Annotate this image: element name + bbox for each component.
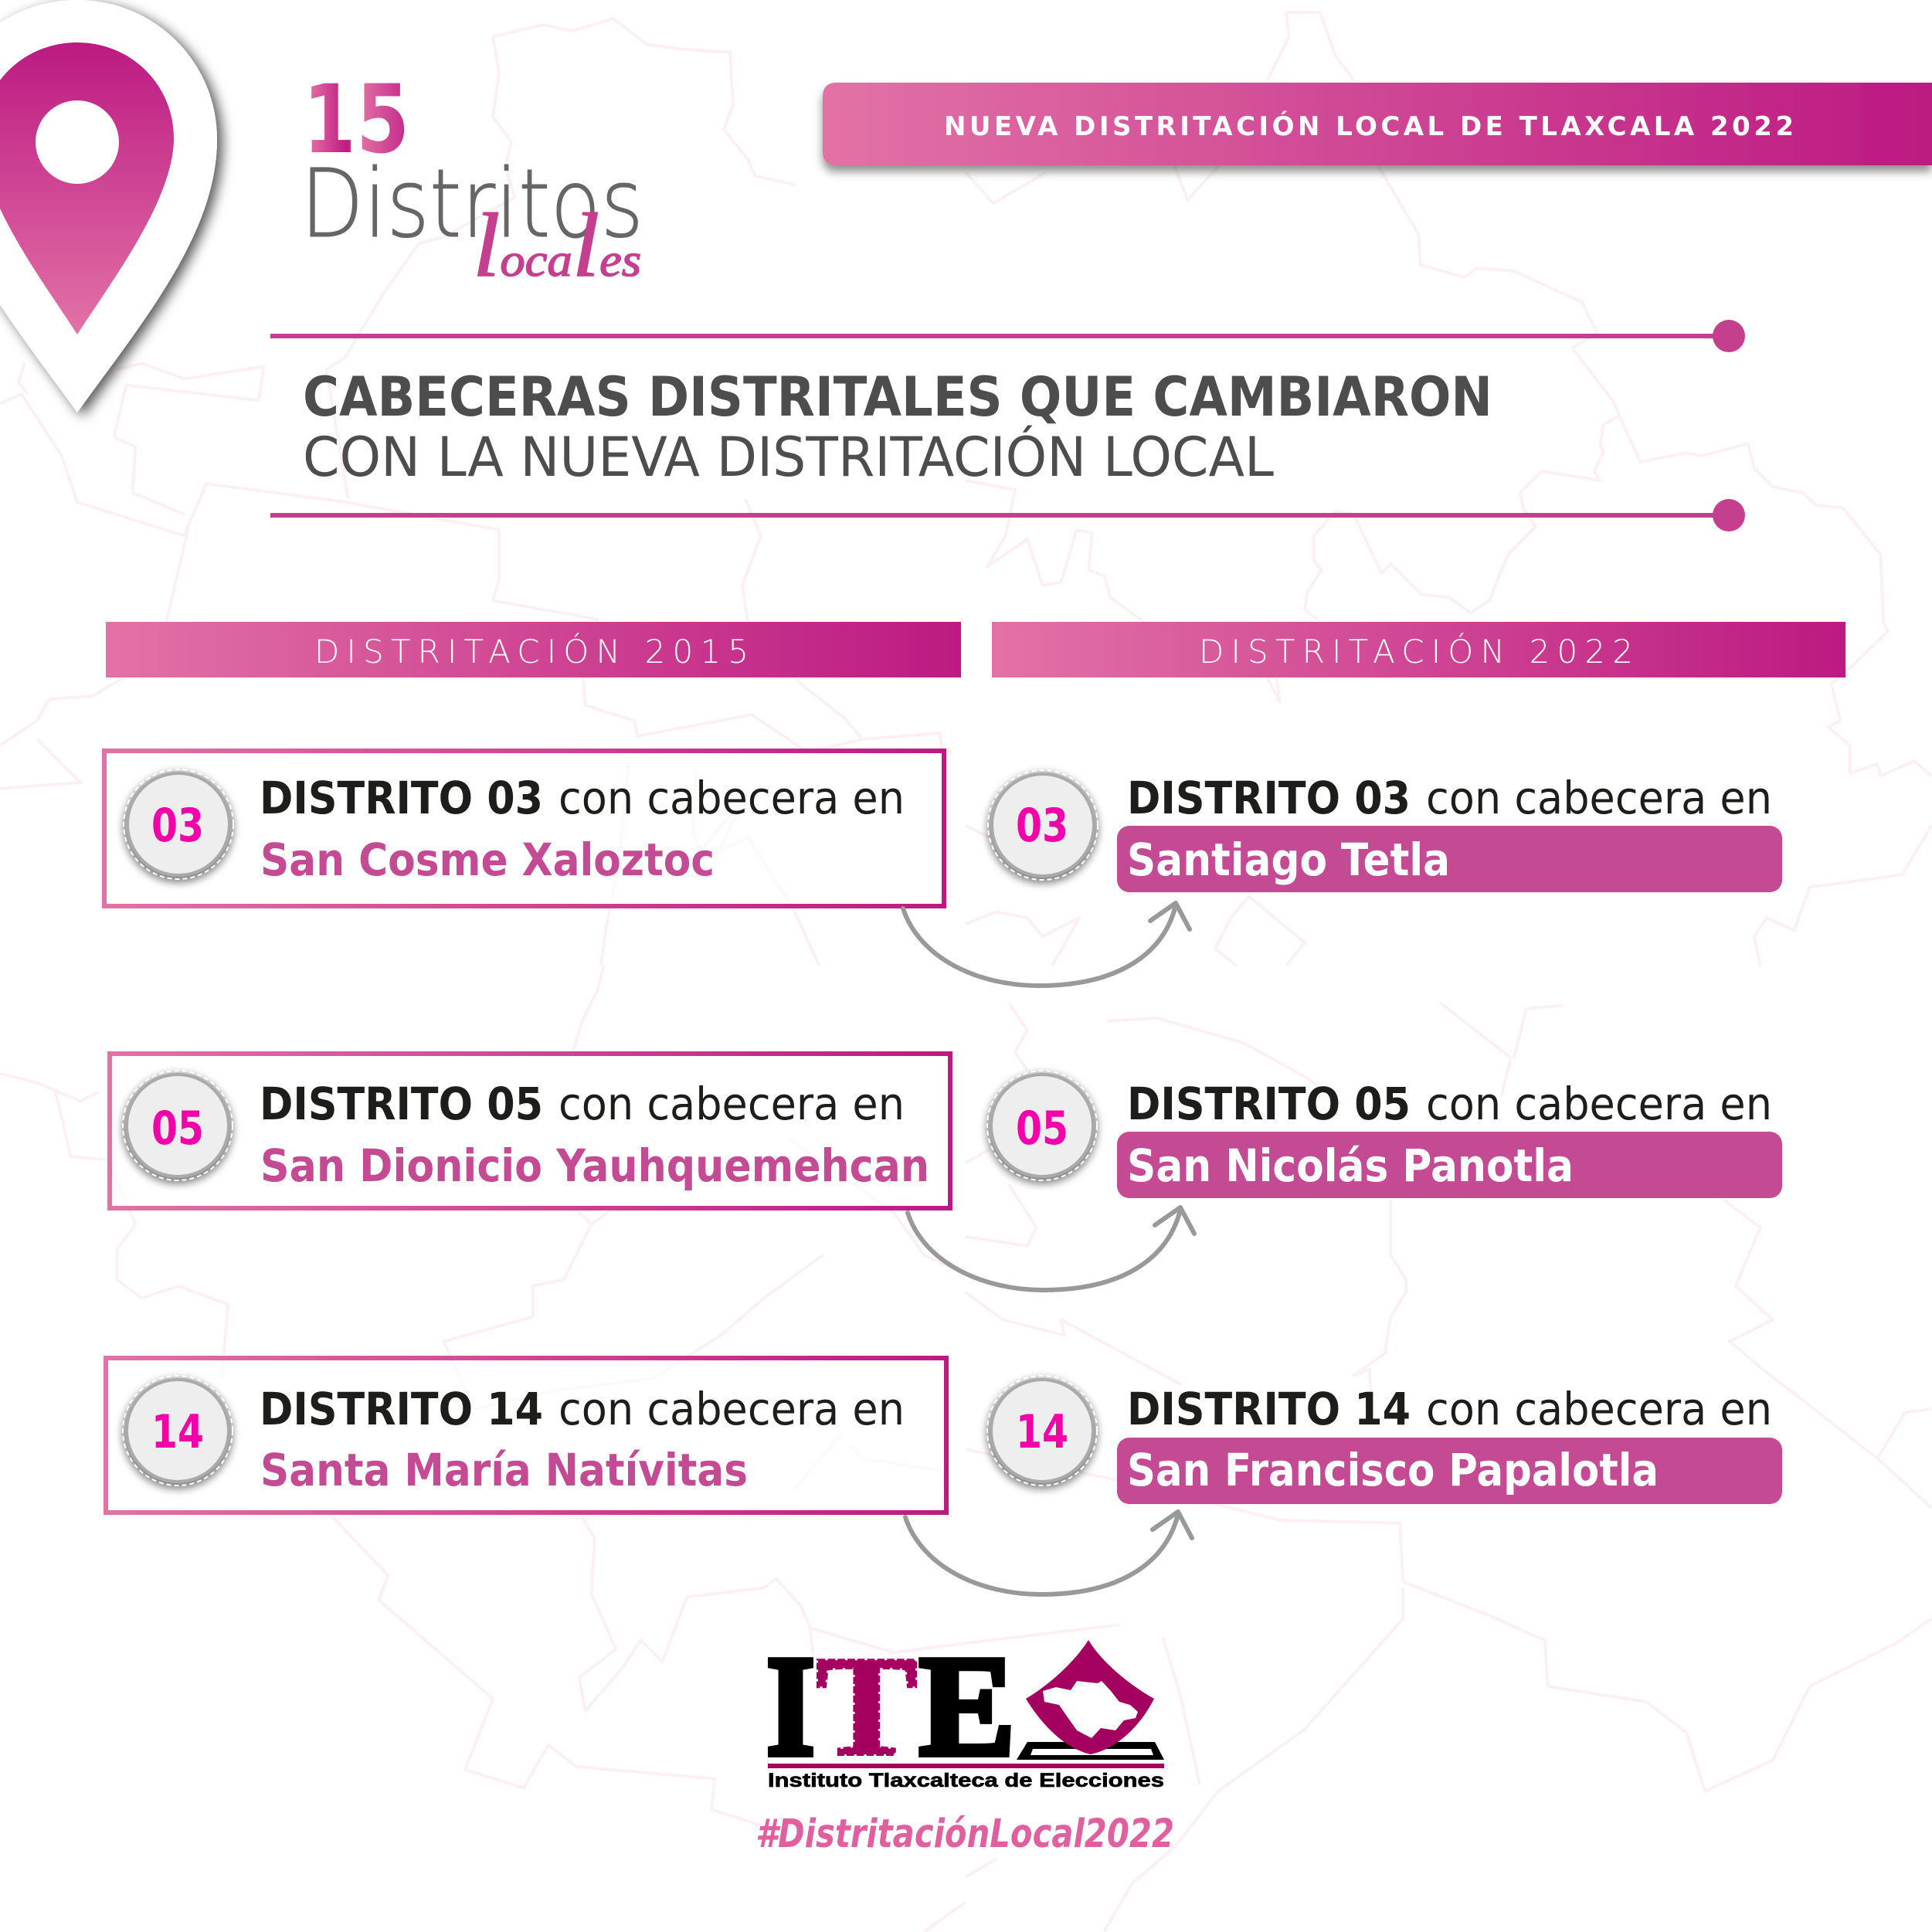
icon: location pin <box>0 0 217 413</box>
arrow: row 05 <box>908 1207 1194 1290</box>
arrow: row 14 <box>905 1512 1192 1594</box>
row 14: district 2022: San Francisco Papalotla <box>1127 1444 1659 1496</box>
row 14: district 2015: DISTRITO 14 <box>260 1383 543 1435</box>
title: 15 Distritos locales: locales <box>473 195 641 296</box>
row 14: district 2022: 14 <box>1016 1405 1068 1459</box>
row 14: district 2015: con cabecera en <box>559 1383 905 1435</box>
row 14: district 2022: DISTRITO 14 <box>1127 1383 1411 1435</box>
heading with rules <box>270 320 1745 531</box>
logo: ITE <box>766 1627 1164 1791</box>
row 03: district 2022: 03 <box>1016 799 1068 853</box>
banner: Nueva distritación local <box>823 83 1932 165</box>
row 14: district 2022 <box>986 1376 1782 1504</box>
column header: Distritación 2022 <box>992 622 1845 677</box>
row 14: district 2022: con cabecera en <box>1426 1383 1772 1435</box>
arrow: row 03 <box>903 903 1190 986</box>
logo: ITE: E <box>919 1627 1015 1786</box>
row 14: district 2015 <box>106 1358 946 1513</box>
row 14: district 2015: 14 <box>151 1405 204 1459</box>
logo: ITE: Instituto Tlaxcalteca de Elecciones <box>768 1770 1164 1791</box>
row 03: district 2015: DISTRITO 03 <box>260 772 543 824</box>
row 03: district 2015: San Cosme Xaloztoc <box>260 834 715 886</box>
column header: Distritación 2015: DISTRITACIÓN 2015 <box>314 632 749 671</box>
logo: ITE: T <box>816 1627 918 1786</box>
row 05: district 2022: 05 <box>1016 1102 1068 1156</box>
row 03: district 2015: 03 <box>151 799 204 853</box>
row 05: district 2022: DISTRITO 05 <box>1127 1078 1411 1130</box>
row 05: district 2022: con cabecera en <box>1426 1078 1772 1130</box>
logo: ITE: I <box>766 1627 815 1786</box>
banner: Nueva distritación local: NUEVA DISTRITACIÓN LOCAL DE TLAXCALA 2022 <box>944 110 1794 142</box>
row 14: district 2015: Santa María Natívitas <box>260 1444 748 1496</box>
row 05: district 2022 <box>986 1071 1782 1198</box>
heading with rules: CABECERAS DISTRITALES QUE CAMBIARON <box>303 365 1492 429</box>
row 05: district 2015 <box>110 1054 950 1208</box>
row 05: district 2015: con cabecera en <box>559 1078 905 1130</box>
row 03: district 2015 <box>104 751 944 906</box>
row 05: district 2022: San Nicolás Panotla <box>1127 1139 1574 1192</box>
row 05: district 2015: 05 <box>151 1102 204 1156</box>
row 03: district 2022: DISTRITO 03 <box>1127 772 1411 824</box>
heading with rules: CON LA NUEVA DISTRITACIÓN LOCAL <box>303 426 1274 489</box>
row 05: district 2015: DISTRITO 05 <box>260 1078 543 1130</box>
row 03: district 2015: con cabecera en <box>559 772 905 824</box>
row 03: district 2022: Santiago Tetla <box>1127 834 1450 886</box>
column header: Distritación 2022: DISTRITACIÓN 2022 <box>1199 632 1633 671</box>
row 03: district 2022: con cabecera en <box>1426 772 1772 824</box>
column header: Distritación 2015 <box>106 622 961 677</box>
row 03: district 2022 <box>987 770 1782 892</box>
title: 15 Distritos locales <box>300 65 643 296</box>
hashtag: #DistritaciónLocal2022 <box>755 1811 1174 1857</box>
row 05: district 2015: San Dionicio Yauhquemehcan <box>260 1139 929 1192</box>
title: 15 Distritos locales: Distritos <box>300 149 643 259</box>
title: 15 Distritos locales: 15 <box>303 65 409 175</box>
